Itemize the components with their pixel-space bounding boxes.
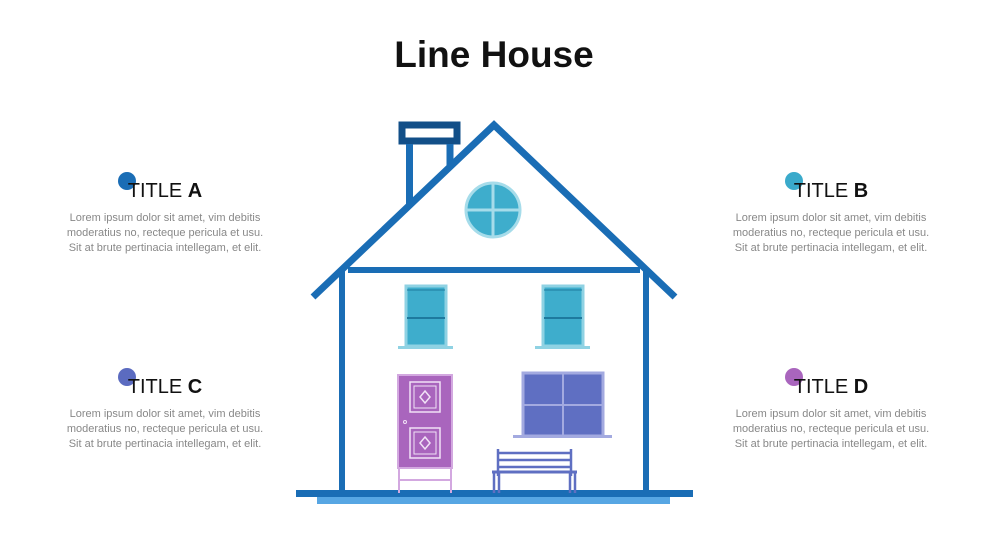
dot B [785, 172, 803, 190]
text block: title C: moderatius no, recteque pericula et usu. [67, 423, 263, 435]
dot A [118, 172, 136, 190]
dot D [785, 368, 803, 386]
round window [466, 183, 520, 237]
bench [492, 449, 577, 493]
text block: title B: moderatius no, recteque pericula et usu. [733, 227, 929, 239]
text block: title B: Sit at brute pertinacia intellegam, et elit. [735, 242, 927, 254]
text block: title D: Lorem ipsum dolor sit amet, vim debitis [736, 408, 926, 420]
text block: title A [67, 172, 263, 254]
roof [313, 125, 675, 297]
text block: title B [733, 172, 929, 254]
text block: title C [67, 368, 263, 450]
text block: title B: TITLE B [794, 180, 868, 202]
text block: title D: moderatius no, recteque pericula et usu. [733, 423, 929, 435]
door [398, 375, 452, 493]
text block: title C: Sit at brute pertinacia intellegam, et elit. [69, 438, 261, 450]
text block: title A: TITLE A [128, 180, 202, 202]
text block: title A: Lorem ipsum dolor sit amet, vim debitis [70, 212, 260, 224]
text block: title B: Lorem ipsum dolor sit amet, vim debitis [736, 212, 926, 224]
text block: title A: moderatius no, recteque pericula et usu. [67, 227, 263, 239]
upper window left [398, 286, 453, 349]
title: Line House [394, 34, 594, 75]
text block: title D [733, 368, 929, 450]
text block: title C: TITLE C [128, 376, 202, 398]
big window [513, 373, 612, 438]
text block: title D: Sit at brute pertinacia intellegam, et elit. [735, 438, 927, 450]
text block: title A: Sit at brute pertinacia intellegam, et elit. [69, 242, 261, 254]
text block: title D: TITLE D [794, 376, 868, 398]
dot C [118, 368, 136, 386]
text block: title C: Lorem ipsum dolor sit amet, vim debitis [70, 408, 260, 420]
walls [296, 267, 693, 504]
upper window right [535, 286, 590, 349]
chimney [402, 125, 457, 206]
